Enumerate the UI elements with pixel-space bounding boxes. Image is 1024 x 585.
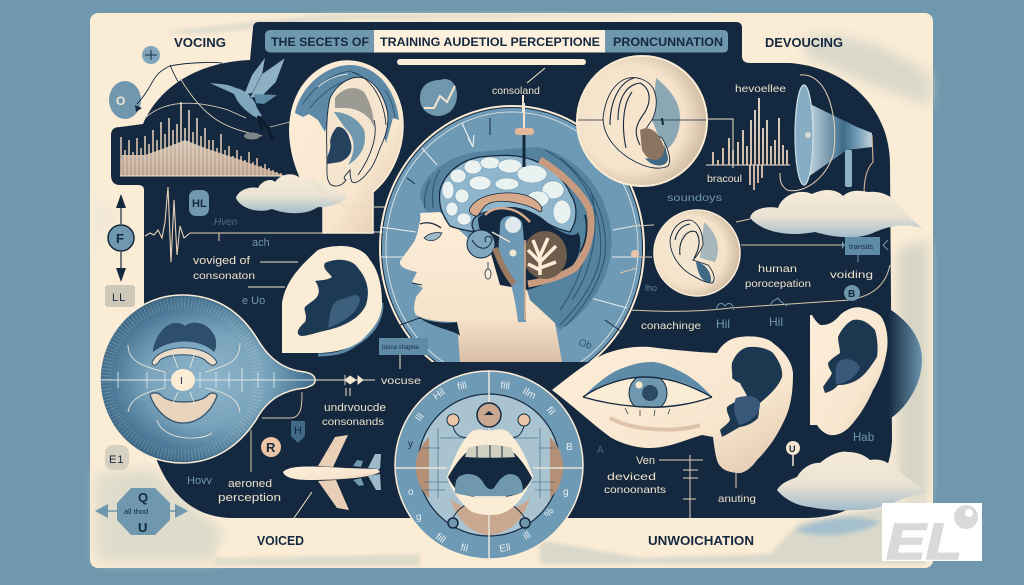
connector lines	[137, 62, 290, 136]
badge: B with long connector: B	[848, 289, 855, 300]
wheel glyphs: fil	[544, 405, 557, 417]
label: human perception: human	[758, 263, 797, 275]
label: hao: lho	[645, 283, 657, 293]
box label	[379, 338, 428, 369]
illustration: head with ear	[290, 61, 403, 233]
icon: O badge	[109, 81, 142, 119]
label: Hab: Hab	[853, 432, 874, 444]
label: soundoys: soundoys	[667, 192, 722, 204]
tan strip	[495, 248, 514, 284]
label: Hil markers: Hil	[716, 317, 730, 331]
connectors: small orb	[620, 219, 842, 273]
icon: blue squiggle badge	[420, 79, 457, 116]
label: consonant: consoland	[492, 85, 540, 97]
badge: B with long connector	[630, 265, 890, 311]
label: devoiced consonants: Ven	[636, 455, 655, 467]
label: e Uo: e Uo	[242, 295, 265, 307]
tongue	[455, 474, 523, 497]
label: undervoiced consonants: consonands	[322, 416, 384, 428]
icon: U pin	[786, 441, 800, 466]
label: anuting	[718, 473, 756, 505]
title banner	[265, 30, 728, 52]
face and neck	[400, 212, 562, 362]
outer ear	[327, 77, 388, 186]
label: Hil markers: Hil	[769, 315, 783, 329]
wheel glyphs	[408, 380, 573, 555]
icon: hummingbird	[210, 58, 285, 140]
tab: voiced	[215, 518, 400, 556]
title underline bar	[397, 59, 586, 65]
wheel glyphs: fill	[433, 531, 447, 546]
label: human perception	[745, 263, 811, 290]
small nodes	[453, 426, 525, 518]
connector: plane to voiced	[294, 492, 312, 518]
ear shading	[335, 88, 374, 128]
label: anuting: anuting	[718, 493, 756, 505]
tab: voiced: VOICED	[257, 534, 304, 548]
pin marker	[515, 95, 534, 167]
brain	[439, 155, 576, 239]
label: undervoiced consonants	[322, 388, 386, 428]
lower lip	[150, 393, 217, 423]
hair	[295, 65, 399, 143]
label: pulse waveform	[145, 187, 323, 262]
wheel glyphs: Ell	[499, 542, 511, 555]
badge: E1	[105, 445, 129, 470]
ear cavity	[327, 127, 352, 164]
box: transits: transits	[849, 242, 873, 251]
heading: devoicing: DEVOUCING	[765, 35, 843, 50]
illustration: right ear	[810, 307, 922, 435]
label: hevoellee: hevoellee	[735, 83, 786, 95]
eye lid	[583, 362, 712, 397]
watermark logo: EL	[886, 513, 962, 570]
box label: Iouna shapna	[382, 345, 419, 351]
radial ribbing	[106, 303, 258, 455]
earring	[487, 262, 489, 270]
wheel glyphs: Ilm	[521, 386, 538, 402]
diagram: F arrows	[108, 194, 134, 282]
brain stem	[499, 216, 526, 322]
mouth interior	[448, 445, 532, 498]
illustration: megaphone	[780, 75, 873, 230]
ear cavity	[298, 260, 368, 336]
wheel glyphs: y	[408, 439, 413, 450]
brow and eye	[420, 223, 441, 228]
connector: lens to aeroned	[251, 392, 302, 472]
label: voiced of consonant: consonaton	[193, 270, 255, 282]
diagram: F arrows: F	[116, 231, 124, 246]
lens scale	[100, 368, 314, 392]
icon: U pin: U	[789, 444, 796, 454]
teeth	[465, 445, 515, 458]
label: consonant	[492, 68, 545, 97]
label: vocuse	[315, 375, 421, 387]
label: bracoul: bracoul	[707, 173, 742, 185]
illustration: lens with lips: I	[180, 376, 183, 387]
lips	[447, 429, 533, 515]
label: aeroned perception: perception	[218, 492, 281, 504]
dark central panel	[111, 22, 892, 518]
illustration: ear at middle left	[282, 246, 382, 355]
label: voiced of consonant	[193, 255, 298, 287]
tan corpus callosum	[469, 193, 542, 216]
wheel glyphs: g	[416, 512, 422, 523]
label: voiced of consonant: voviged of	[193, 255, 251, 267]
icon: O badge: O	[116, 94, 125, 108]
label: undervoiced consonants: undrvoucde	[324, 402, 386, 414]
title banner: TRAINING AUDETIOL PERCEPTIONE	[380, 35, 600, 49]
title banner: PRONCUNNATION	[613, 35, 723, 49]
heading: voicing: VOCING	[174, 35, 226, 50]
icon: hexagon with arrows: U	[138, 520, 147, 535]
badge: R	[261, 437, 281, 457]
badge: H: H	[294, 425, 302, 437]
waveform: right	[706, 98, 790, 190]
icon: hexagon with arrows: all thod	[124, 507, 148, 516]
wheel glyphs: fill	[456, 380, 468, 393]
illustration: profile head	[400, 147, 639, 362]
back hair	[420, 147, 611, 330]
badge: HL: HL	[192, 198, 207, 210]
label: human perception: porocepation	[745, 278, 811, 290]
rear tan band	[528, 160, 591, 284]
illustration: lens with lips	[100, 295, 315, 463]
brain lobes	[442, 157, 571, 225]
box: transits	[842, 237, 888, 262]
main cream panel	[90, 13, 933, 568]
node	[631, 250, 639, 258]
label: voiding: voiding	[830, 269, 873, 281]
cerebellum	[523, 231, 567, 279]
small inner lines	[422, 428, 556, 498]
watermark logo	[882, 503, 982, 570]
badge: H	[291, 421, 305, 443]
central circle	[380, 106, 644, 390]
tan lower face	[450, 498, 530, 535]
icon: hexagon with arrows	[95, 488, 188, 535]
small A label: A	[597, 445, 604, 456]
connector: cloud and neck	[312, 180, 388, 232]
illustration: small ear orb	[654, 210, 740, 296]
label: devoiced consonants: conoonants	[604, 484, 666, 496]
wheel glyphs: B	[566, 442, 573, 453]
badge: HL	[189, 190, 209, 216]
wheel glyphs: fill	[500, 380, 510, 392]
badge: LL	[105, 285, 135, 307]
cloud: bottom right	[777, 452, 927, 510]
label: aeroned perception: aeroned	[228, 478, 272, 490]
central circle: Ob	[577, 337, 594, 352]
ear cavity	[720, 347, 782, 437]
iris	[628, 378, 668, 406]
inner dark region	[478, 207, 580, 290]
wheel glyphs: ill	[521, 530, 533, 542]
cloud: left	[236, 174, 347, 213]
icon: small dial	[142, 46, 160, 64]
eye white	[583, 377, 712, 407]
label: how: Hovv	[187, 475, 213, 487]
label: devoiced consonants: deviced	[607, 471, 656, 483]
cochlea	[467, 230, 495, 258]
tab: unvoicing: UNWOICHATION	[648, 534, 754, 548]
waveform: top left	[120, 102, 285, 176]
label: vocuse: vocuse	[381, 375, 421, 387]
icon: hexagon with arrows: Q	[138, 490, 148, 505]
jaw shadow	[416, 315, 460, 336]
wheel glyphs: g	[563, 487, 569, 498]
upper lip	[153, 323, 216, 352]
wheel glyphs: o	[408, 487, 414, 498]
label: Hil markers	[716, 298, 787, 331]
tab: unvoicing	[620, 518, 785, 552]
badge: E1: E1	[109, 454, 124, 466]
illustration: eye and ear	[552, 336, 793, 473]
wheel glyphs: fil	[459, 542, 469, 555]
tan side bars	[416, 437, 429, 498]
cloud: right	[750, 190, 922, 237]
title banner: THE SECETS OF	[271, 35, 369, 49]
badge: LL: LL	[112, 292, 126, 304]
illustration: top right ear orb	[577, 56, 707, 186]
label: ach: ach	[252, 237, 270, 249]
wheel glyphs: Ill	[413, 411, 427, 424]
label: hven: Hven	[214, 217, 238, 228]
label: devoiced consonants	[604, 455, 703, 518]
illustration: mouth diagram wheel	[395, 370, 583, 560]
badge: R: R	[266, 440, 276, 455]
label: aeroned perception	[218, 478, 281, 504]
illustration: airplane	[283, 435, 381, 510]
label: conachinge: conachinge	[641, 320, 701, 332]
wheel glyphs: Hil	[431, 387, 447, 402]
wheel glyphs: %	[542, 506, 557, 520]
